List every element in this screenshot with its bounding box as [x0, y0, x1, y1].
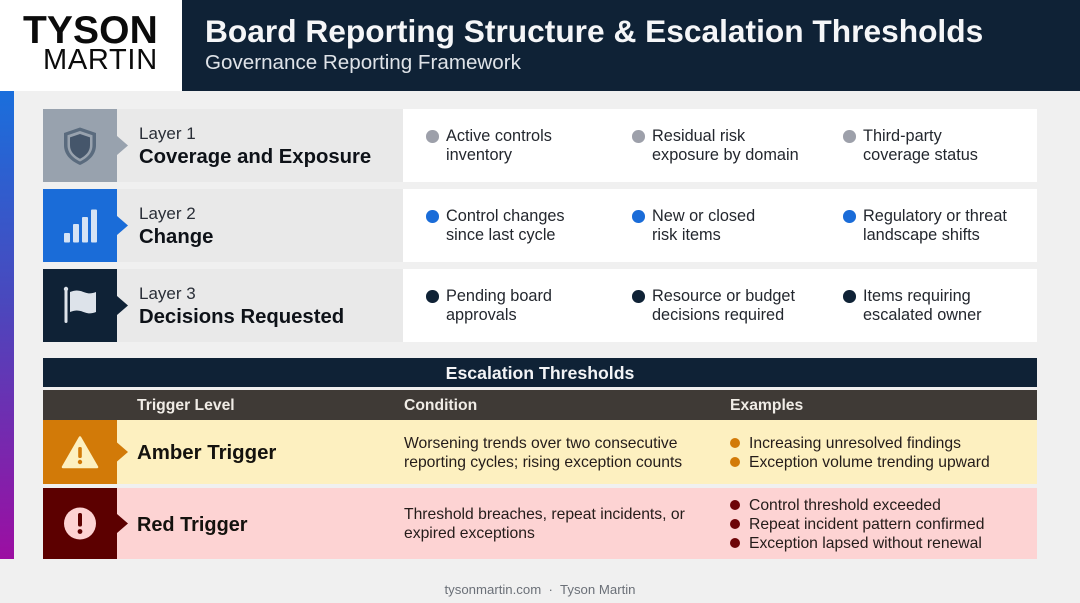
bullet: third-party: Third-party	[863, 126, 942, 144]
icon: alert circle	[43, 488, 128, 559]
layer 1 name: Coverage and Exposure	[139, 146, 371, 168]
panel: amber trigger	[43, 420, 1037, 484]
panel: red trigger	[43, 488, 1037, 559]
bullet: control changes	[426, 206, 565, 244]
amber condition: Worsening trends over two consecutive	[404, 434, 678, 452]
bullet: pending approvals	[426, 286, 552, 324]
bullet: control changes: Control changes	[446, 206, 565, 224]
bullet: residual risk: Residual risk	[652, 126, 745, 144]
amber condition	[404, 434, 682, 471]
bullet: active controls: inventory	[446, 146, 512, 164]
bullet: regulatory: landscape shifts	[863, 226, 980, 244]
bullet: escalated owner: Items requiring	[863, 286, 971, 304]
bullet: residual risk	[632, 126, 799, 164]
layer 1 label	[117, 109, 403, 182]
bullet: escalated owner	[843, 286, 982, 324]
logo wordmark: Martin: MARTIN	[43, 44, 158, 76]
layer 2 label	[117, 189, 403, 262]
layer 3 label	[117, 269, 403, 342]
layer 3 number: Layer 3	[139, 284, 196, 303]
logo wordmark: Tyson: TYSON	[23, 9, 158, 52]
layer 3 name: Decisions Requested	[139, 306, 344, 328]
amber trigger name: Amber Trigger	[137, 442, 276, 464]
bullet: third-party: coverage status	[863, 146, 978, 164]
bullet: active controls: Active controls	[446, 126, 552, 144]
left gradient accent bar	[0, 91, 14, 559]
amber examples: Exception volume trending upward	[749, 454, 990, 471]
bullet: new or closed: New or closed	[652, 206, 755, 224]
column: trigger level: Trigger Level	[137, 397, 235, 414]
red examples: Control threshold exceeded	[749, 496, 941, 514]
bullet: new or closed	[632, 206, 755, 244]
bullet: active controls	[426, 126, 552, 164]
footer: tysonmartin.com · Tyson Martin	[444, 582, 636, 597]
subtitle: Governance Reporting Framework	[205, 51, 521, 74]
layer 1 number: Layer 1	[139, 124, 196, 143]
red condition: Threshold breaches, repeat incidents, or	[404, 506, 685, 523]
table header	[43, 390, 1037, 420]
icon: shield	[43, 109, 128, 182]
red condition: expired exceptions	[404, 525, 535, 542]
column: condition: Condition	[404, 397, 477, 414]
bullet: resource or budget: decisions required	[652, 306, 784, 324]
red examples	[730, 496, 984, 552]
bullet: pending approvals: Pending board	[446, 286, 552, 304]
column: examples: Examples	[730, 397, 803, 414]
amber examples	[730, 434, 990, 471]
bullet: residual risk: exposure by domain	[652, 146, 799, 164]
red examples: Exception lapsed without renewal	[749, 535, 982, 552]
header banner	[182, 0, 1080, 91]
bullet: escalated owner: escalated owner	[863, 306, 982, 324]
layer 2 number: Layer 2	[139, 204, 196, 223]
bullet: resource or budget	[632, 286, 795, 324]
icon: bar chart	[43, 189, 128, 262]
title: Board Reporting Structure & Escalation Thresholds	[205, 13, 983, 49]
layer 2 name: Change	[139, 226, 213, 248]
amber examples: Increasing unresolved findings	[749, 434, 961, 452]
heading: escalation thresholds: Escalation Thresholds	[446, 363, 634, 383]
icon: warning triangle	[43, 420, 128, 484]
amber condition: reporting cycles; rising exception counts	[404, 454, 682, 471]
red examples: Repeat incident pattern confirmed	[749, 516, 984, 533]
bullet: regulatory	[843, 206, 1007, 244]
logo panel	[0, 0, 182, 91]
panel: layer 1	[43, 109, 1037, 182]
red condition	[404, 506, 685, 542]
heading: escalation thresholds	[43, 358, 1037, 387]
icon: flag	[43, 269, 128, 342]
bullet: third-party	[843, 126, 978, 164]
panel: layer 2	[43, 189, 1037, 262]
panel: layer 3	[43, 269, 1037, 342]
bullet: regulatory: Regulatory or threat	[863, 206, 1007, 224]
bullet: pending approvals: approvals	[446, 306, 517, 324]
red trigger name: Red Trigger	[137, 514, 248, 536]
bullet: new or closed: risk items	[652, 226, 721, 244]
bullet: control changes: since last cycle	[446, 226, 556, 244]
bullet: resource or budget: Resource or budget	[652, 286, 795, 304]
